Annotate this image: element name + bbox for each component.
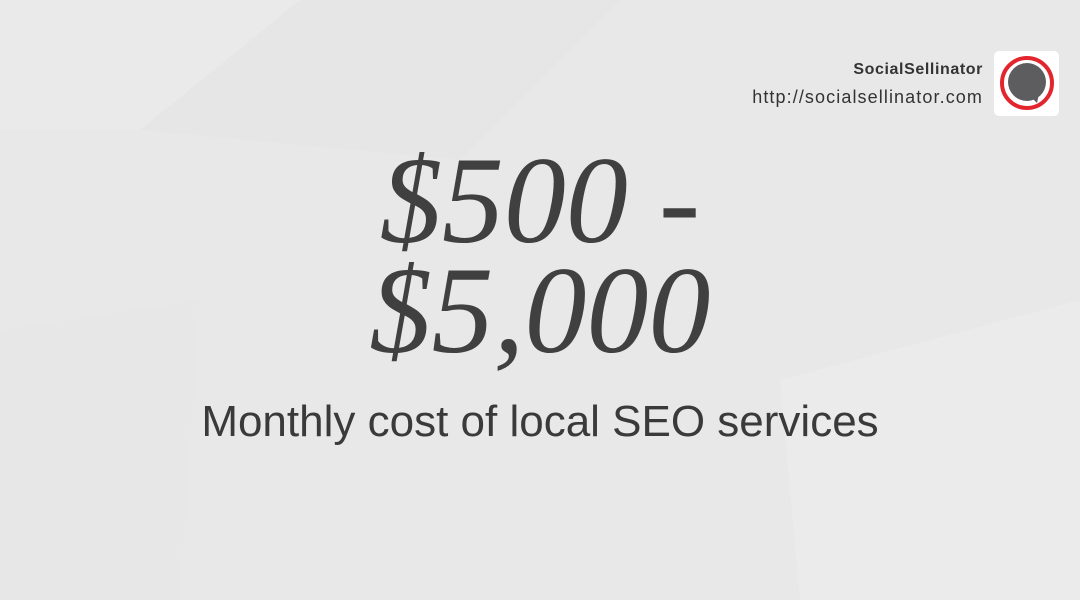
headline figure: $5,000 (370, 242, 710, 379)
icon: logo (994, 51, 1059, 116)
brand name: SocialSellinator (853, 61, 983, 78)
brand url: http://socialsellinator.com (752, 87, 983, 107)
headline figure (370, 132, 710, 379)
subtitle: Monthly cost of local SEO services (201, 397, 879, 446)
headline figure: $500 - (380, 132, 700, 269)
